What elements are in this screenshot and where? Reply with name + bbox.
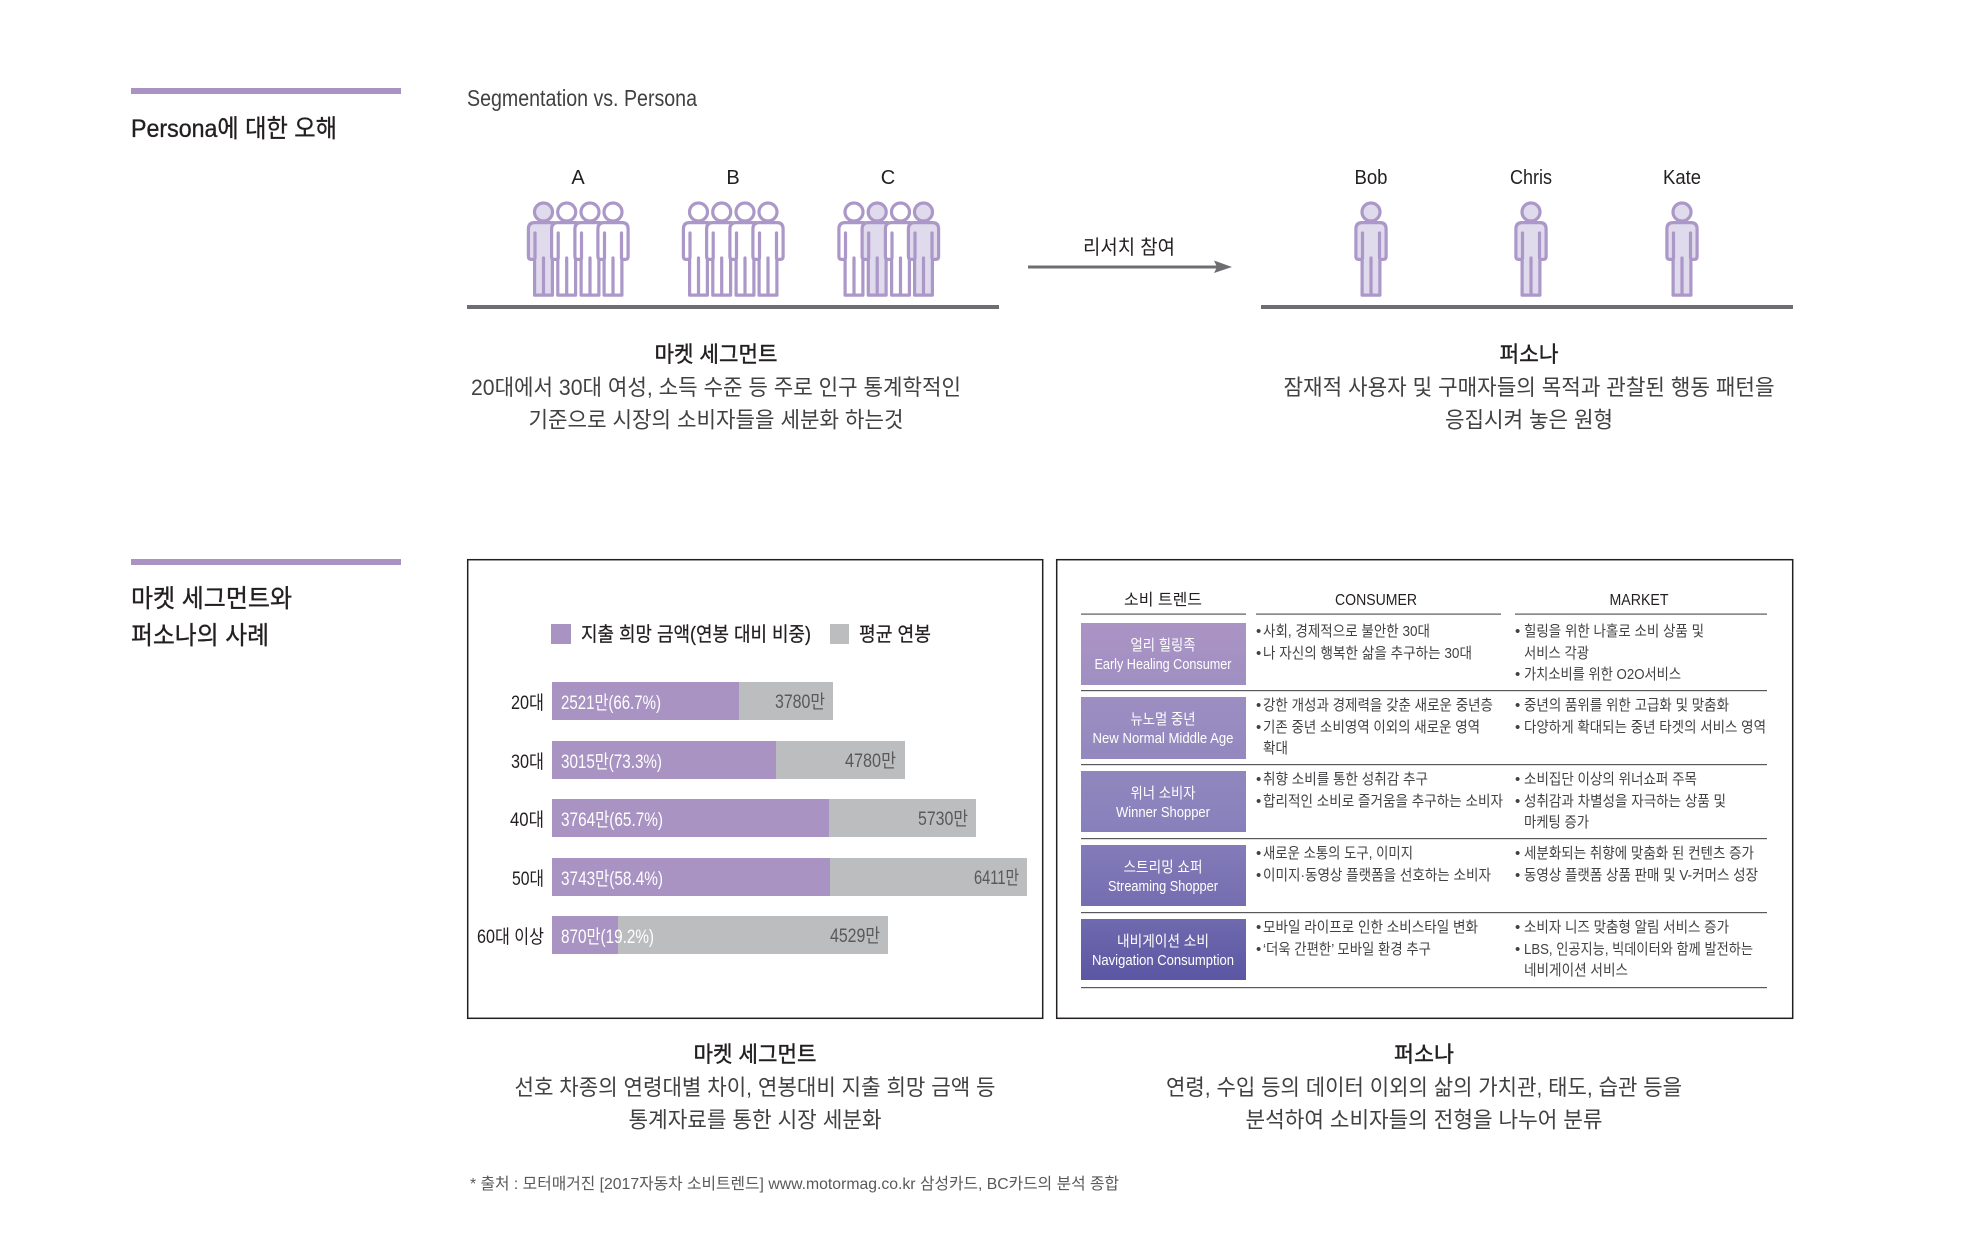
row: 위너 소비자: 마케팅 증가: [1524, 814, 1589, 831]
bar row: 30대: [511, 741, 905, 779]
bar row: 40대: 5730만: [918, 808, 968, 830]
icon: people group B: [683, 203, 783, 295]
heading: 마켓 세그먼트와 퍼소나의 사례: 퍼소나의 사례: [131, 622, 269, 650]
row: 위너 소비자: •: [1256, 771, 1261, 788]
row: 스트리밍 쇼퍼: 이미지·동영상 플랫폼을 선호하는 소비자: [1263, 867, 1491, 884]
icon: person Kate: [1667, 203, 1697, 295]
source note: * 출처 : 모터매거진 [2017자동차 소비트렌드] www.motormag.co.kr 삼성카드, BC카드의 분석 종합: [470, 1175, 1119, 1193]
bar row: 50대: 6411만: [974, 867, 1019, 889]
row: 얼리 힐링족: [1081, 623, 1767, 691]
row: 얼리 힐링족: 얼리 힐링족: [1130, 637, 1196, 654]
bar row: 50대: 3743만(58.4%): [561, 868, 663, 890]
row: 위너 소비자: •: [1515, 771, 1520, 788]
row: 얼리 힐링족: •: [1256, 623, 1261, 640]
text block: persona definition: 잠재적 사용자 및 구매자들의 목적과 관찰된 행동 패턴을: [1284, 375, 1774, 400]
row: 내비게이션 소비: LBS, 인공지능, 빅데이터와 함께 발전하는: [1524, 941, 1753, 958]
text block: market segment definition: 20대에서 30대 여성, 소득 수준 등 주로 인구 통계학적인: [471, 375, 961, 400]
row: 내비게이션 소비: •: [1256, 919, 1261, 936]
bar row: 60대 이상: 4529만: [830, 925, 880, 947]
text block: market segment case caption: [514, 1042, 996, 1132]
panel: market segment diagram: [467, 167, 999, 309]
row: 스트리밍 쇼퍼: •: [1256, 867, 1261, 884]
row: 내비게이션 소비: •: [1515, 919, 1520, 936]
row: 스트리밍 쇼퍼: •: [1515, 867, 1520, 884]
bar row: 40대: 3764만(65.7%): [561, 809, 663, 831]
row: 뉴노멀 중년: 다양하게 확대되는 중년 타겟의 서비스 영역: [1524, 719, 1766, 736]
bar row: 60대 이상: 870만(19.2%): [561, 926, 654, 948]
row: 위너 소비자: •: [1515, 793, 1520, 810]
icon: people group C: [839, 203, 939, 295]
text block: market segment definition: 기준으로 시장의 소비자들을 세분화 하는것: [528, 408, 904, 432]
row: 스트리밍 쇼퍼: •: [1256, 845, 1261, 862]
row: 내비게이션 소비: •: [1515, 941, 1520, 958]
text block: persona definition: 응집시켜 놓은 원형: [1445, 408, 1613, 432]
section bar: persona: [131, 88, 401, 94]
row: 뉴노멀 중년: 확대: [1263, 740, 1288, 757]
bar row: 50대: [512, 858, 1027, 896]
row: 뉴노멀 중년: •: [1256, 719, 1261, 736]
row: 위너 소비자: [1081, 771, 1767, 839]
subheading: Segmentation vs. Persona: Segmentation vs. Persona: [467, 85, 697, 111]
row: 내비게이션 소비: 모바일 라이프로 인한 소비스타일 변화: [1263, 919, 1478, 936]
bar row: 30대: 3015만(73.3%): [561, 751, 662, 773]
label Chris: Chris: [1510, 167, 1552, 189]
panel: consumption trend table: [1057, 560, 1793, 1018]
row: 뉴노멀 중년: 강한 개성과 경제력을 갖춘 새로운 중년층: [1263, 697, 1493, 714]
row: 위너 소비자: 성취감과 차별성을 자극하는 상품 및: [1524, 793, 1726, 810]
row: 얼리 힐링족: •: [1256, 645, 1261, 662]
row: 뉴노멀 중년: •: [1256, 697, 1261, 714]
text block: persona definition: [1284, 342, 1774, 432]
row: 뉴노멀 중년: 기존 중년 소비영역 이외의 새로운 영역: [1263, 719, 1480, 736]
text block: market segment definition: 마켓 세그먼트: [654, 342, 778, 367]
row: 위너 소비자: •: [1256, 793, 1261, 810]
row: 내비게이션 소비: ‘더욱 간편한’ 모바일 환경 추구: [1263, 941, 1431, 958]
table header: CONSUMER: [1335, 592, 1417, 609]
icon: person Chris: [1516, 203, 1546, 295]
icon: people group A: [528, 203, 628, 295]
row: 얼리 힐링족: 사회, 경제적으로 불안한 30대: [1263, 623, 1430, 640]
legend: 지출 희망 금액(연봉 대비 비중): [581, 623, 811, 646]
bar row: 60대 이상: [477, 916, 888, 954]
bar row: 40대: 40대: [510, 809, 544, 831]
row: 얼리 힐링족: •: [1515, 666, 1520, 683]
table header: [1081, 591, 1767, 615]
bar row: 20대: 20대: [511, 692, 544, 714]
text block: market segment case caption: 통계자료를 통한 시장 세분화: [628, 1108, 882, 1132]
icon: person Bob: [1356, 203, 1386, 295]
text block: market segment case caption: 마켓 세그먼트: [694, 1042, 816, 1067]
row: 위너 소비자: Winner Shopper: [1116, 805, 1210, 821]
row: 스트리밍 쇼퍼: 새로운 소통의 도구, 이미지: [1263, 845, 1413, 862]
row: 스트리밍 쇼퍼: 스트리밍 쇼퍼: [1124, 859, 1202, 876]
row: 내비게이션 소비: 소비자 니즈 맞춤형 알림 서비스 증가: [1524, 919, 1729, 936]
row: 뉴노멀 중년: •: [1515, 697, 1520, 714]
text block: persona case caption: [1166, 1042, 1682, 1132]
table header: MARKET: [1610, 592, 1669, 609]
row: 얼리 힐링족: 서비스 각광: [1524, 645, 1589, 662]
legend: [551, 623, 931, 646]
label Kate: Kate: [1663, 167, 1701, 189]
row: 뉴노멀 중년: 중년의 품위를 위한 고급화 및 맞춤화: [1524, 697, 1729, 714]
row: 내비게이션 소비: •: [1256, 941, 1261, 958]
bar row: 30대: 30대: [511, 751, 544, 773]
row: 내비게이션 소비: [1081, 919, 1767, 988]
row: 얼리 힐링족: •: [1515, 623, 1520, 640]
row: 뉴노멀 중년: New Normal Middle Age: [1092, 731, 1234, 747]
row: 얼리 힐링족: 나 자신의 행복한 삶을 추구하는 30대: [1263, 645, 1472, 662]
row: 내비게이션 소비: Navigation Consumption: [1092, 953, 1234, 969]
bar row: 60대 이상: 60대 이상: [477, 926, 544, 948]
bar row: 30대: 4780만: [845, 750, 896, 772]
label C: C: [881, 167, 895, 189]
text block: persona case caption: 분석하여 소비자들의 전형을 나누어 분류: [1246, 1108, 1602, 1132]
label B: B: [726, 167, 740, 189]
bar row: 20대: [511, 682, 833, 720]
text block: persona case caption: 연령, 수입 등의 데이터 이외의 삶의 가치관, 태도, 습관 등을: [1166, 1075, 1682, 1100]
text block: market segment case caption: 선호 차종의 연령대별 차이, 연봉대비 지출 희망 금액 등: [514, 1075, 996, 1100]
bar row: 20대: 3780만: [775, 691, 825, 713]
row: 내비게이션 소비: 내비게이션 소비: [1117, 933, 1209, 950]
row: 스트리밍 쇼퍼: Streaming Shopper: [1108, 879, 1218, 895]
heading: Persona에 대한 오해: Persona에 대한 오해: [131, 115, 337, 143]
row: 내비게이션 소비: 네비게이션 서비스: [1524, 962, 1628, 979]
label A: A: [571, 167, 585, 189]
row: 스트리밍 쇼퍼: •: [1515, 845, 1520, 862]
row: 얼리 힐링족: 힐링을 위한 나홀로 소비 상품 및: [1524, 623, 1704, 640]
label Bob: Bob: [1354, 167, 1388, 189]
arrow: research participation: 리서치 참여: [1083, 236, 1175, 259]
row: 얼리 힐링족: Early Healing Consumer: [1094, 657, 1232, 673]
panel: bar chart: [468, 560, 1043, 1018]
row: 스트리밍 쇼퍼: 동영상 플랫폼 상품 판매 및 V-커머스 성장: [1524, 867, 1758, 884]
text block: persona definition: 퍼소나: [1500, 342, 1558, 367]
text block: persona case caption: 퍼소나: [1394, 1042, 1454, 1067]
arrow: research participation: [1028, 236, 1232, 273]
row: 스트리밍 쇼퍼: [1081, 845, 1767, 913]
row: 뉴노멀 중년: [1081, 697, 1767, 765]
section bar: cases: [131, 559, 401, 565]
text block: market segment definition: [471, 342, 961, 432]
panel: persona diagram: [1261, 167, 1793, 309]
row: 위너 소비자: 취향 소비를 통한 성취감 추구: [1263, 771, 1428, 788]
row: 위너 소비자: 위너 소비자: [1130, 785, 1196, 802]
row: 뉴노멀 중년: •: [1515, 719, 1520, 736]
bar row: 20대: 2521만(66.7%): [561, 692, 661, 714]
heading: 마켓 세그먼트와 퍼소나의 사례: 마켓 세그먼트와: [131, 585, 292, 613]
row: 스트리밍 쇼퍼: 세분화되는 취향에 맞춤화 된 컨텐츠 증가: [1524, 845, 1754, 862]
table header: 소비 트렌드: [1124, 591, 1202, 609]
row: 위너 소비자: 소비집단 이상의 위너쇼퍼 주목: [1524, 771, 1697, 788]
bar row: 40대: [510, 799, 976, 837]
row: 뉴노멀 중년: 뉴노멀 중년: [1130, 711, 1196, 728]
row: 위너 소비자: 합리적인 소비로 즐거움을 추구하는 소비자: [1263, 793, 1503, 810]
heading: 마켓 세그먼트와 퍼소나의 사례: [131, 585, 292, 650]
legend: 평균 연봉: [859, 623, 931, 646]
row: 얼리 힐링족: 가치소비를 위한 O2O서비스: [1524, 666, 1681, 683]
bar row: 50대: 50대: [512, 868, 544, 890]
